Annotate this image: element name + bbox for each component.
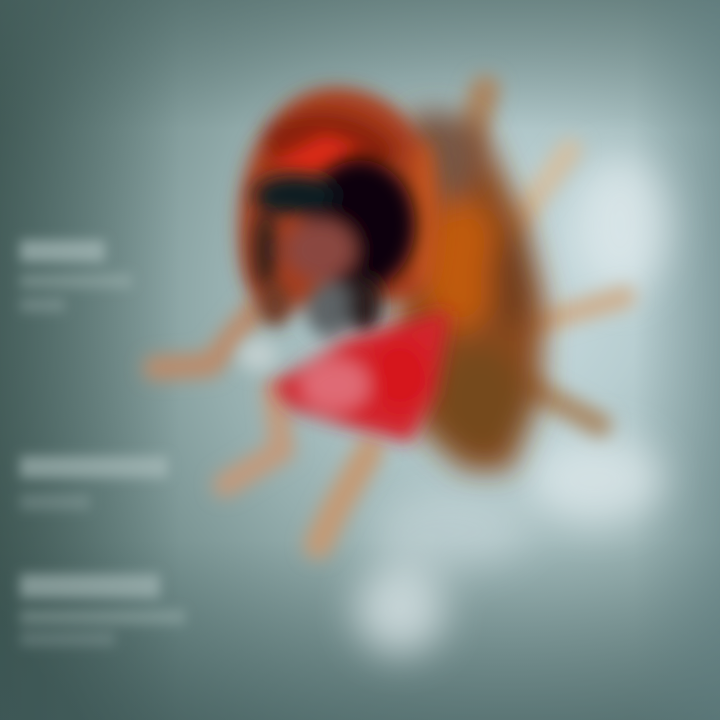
limb: lower left (225, 390, 282, 485)
limb: left arm (155, 310, 255, 368)
limbs (155, 90, 625, 545)
brown body mass (395, 110, 545, 470)
limb: upper right (515, 150, 570, 225)
limb: top (465, 90, 485, 150)
red lower mass (272, 310, 450, 442)
text block: lower left (20, 574, 185, 646)
left pale highlight (238, 339, 278, 371)
pale glow panels on the right (355, 155, 668, 655)
limb: right (530, 297, 625, 325)
limb: lower right (525, 385, 600, 425)
limb: bottom (318, 450, 370, 545)
shell: red orange arch (239, 88, 439, 310)
inner dark cavity (253, 160, 415, 338)
text block: middle left (20, 456, 168, 510)
text block: upper left (20, 240, 132, 312)
